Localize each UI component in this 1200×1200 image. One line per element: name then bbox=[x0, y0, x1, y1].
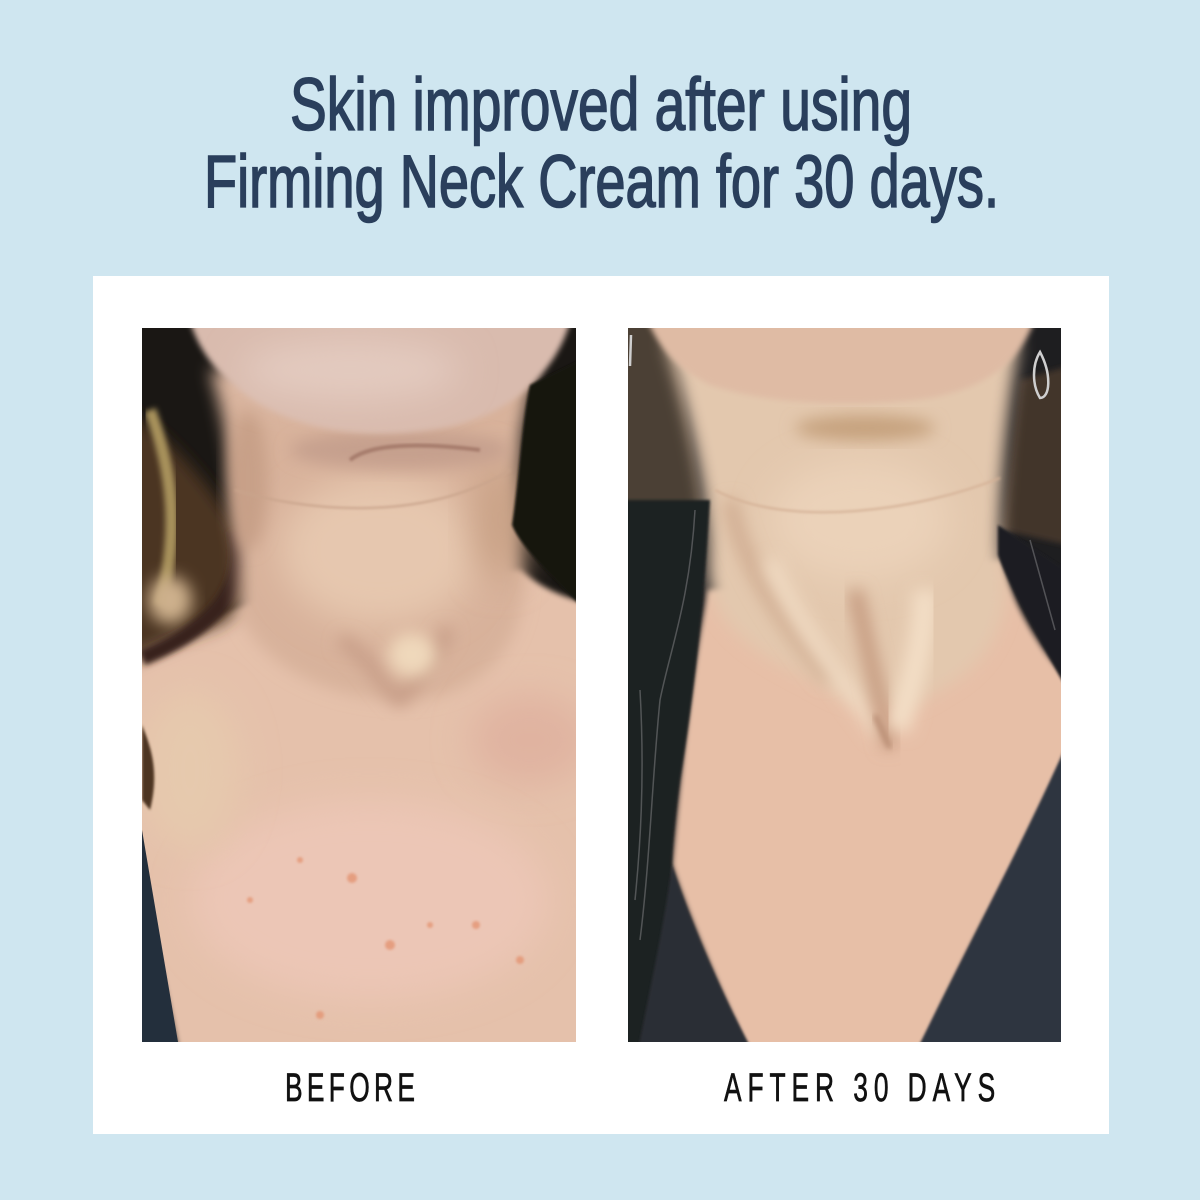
jacket left bbox=[628, 498, 712, 874]
infographic bbox=[93, 75, 1109, 1134]
neck highlight bbox=[280, 475, 480, 625]
jacket pinstripes bbox=[635, 510, 1055, 940]
under jaw shadow bbox=[290, 430, 510, 470]
hair lock bbox=[142, 725, 154, 810]
collarbone highlight bbox=[388, 633, 436, 677]
centre chest tone bbox=[206, 813, 534, 987]
jaw shadow band bbox=[795, 415, 935, 441]
sternal hollow bbox=[855, 590, 890, 748]
neck shadow left bbox=[730, 500, 830, 680]
knit top left bbox=[638, 865, 752, 1050]
title: Skin improved after using bbox=[290, 63, 912, 146]
jaw bbox=[646, 328, 1036, 402]
dark curl bbox=[142, 530, 238, 658]
neck line bbox=[277, 492, 464, 510]
golden strands bbox=[150, 410, 171, 605]
hair left bbox=[628, 328, 702, 501]
knit top right bbox=[912, 725, 1075, 1060]
panel: white card bbox=[93, 276, 1109, 1134]
jaw bbox=[188, 328, 573, 436]
jacket right bbox=[998, 525, 1070, 695]
neck shadow left bbox=[228, 410, 268, 550]
hair right bbox=[512, 360, 580, 605]
chin highlight bbox=[253, 338, 447, 402]
hair right bbox=[1002, 366, 1061, 546]
photo: after bbox=[628, 328, 1061, 1042]
hair left bbox=[142, 413, 244, 669]
right tendon highlight bbox=[897, 590, 925, 730]
collarbone hollow bbox=[340, 630, 450, 700]
label: after 30 days: AFTER 30 DAYS bbox=[724, 1066, 995, 1110]
photo: before bbox=[142, 328, 576, 1042]
neck bbox=[665, 340, 1020, 708]
label: before: BEFORE bbox=[285, 1066, 415, 1110]
right chest flush bbox=[479, 701, 576, 779]
neck shadow right bbox=[474, 460, 526, 580]
neck bbox=[210, 370, 535, 700]
earrings bbox=[630, 335, 1048, 398]
left tendon highlight bbox=[770, 560, 882, 735]
neck line bbox=[715, 478, 1000, 512]
shoulder patch bbox=[148, 576, 192, 624]
neck highlight bbox=[785, 472, 935, 568]
garment bbox=[142, 830, 178, 1042]
left chest light bbox=[184, 796, 212, 816]
freckles bbox=[247, 857, 524, 1019]
hollow tip bbox=[875, 715, 890, 748]
chest and shoulders bbox=[142, 568, 576, 1042]
title bbox=[204, 63, 999, 223]
chest bbox=[672, 560, 1090, 1060]
neck crease bbox=[350, 446, 480, 460]
